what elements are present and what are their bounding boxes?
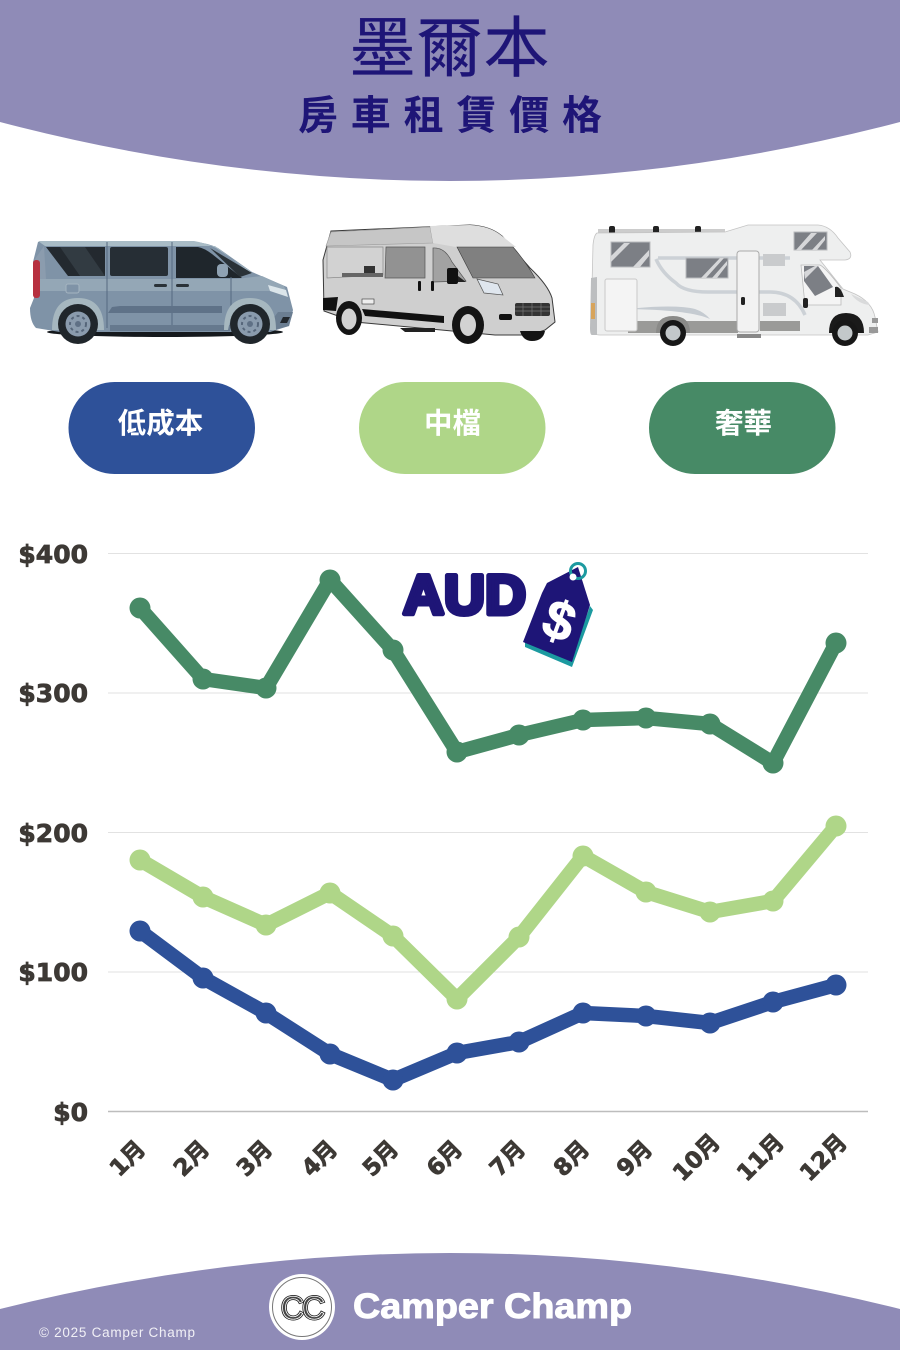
- icon: low-cost minivan: [30, 241, 293, 344]
- x-axis month labels: 10月: [668, 1129, 726, 1187]
- icon: Camper Champ logo: CC: [281, 1290, 324, 1326]
- x-axis month labels: 5月: [358, 1136, 404, 1182]
- legend pill: mid-range: 中檔: [424, 408, 481, 440]
- icon: price tag: [523, 564, 593, 667]
- icon: mid-range van: [323, 225, 555, 344]
- x-axis month labels: 6月: [422, 1136, 468, 1182]
- x-axis month labels: [105, 1129, 853, 1187]
- y-axis labels: $0: [53, 1098, 88, 1127]
- legend pill: low cost: 低成本: [118, 408, 203, 440]
- series: mid-range: [130, 816, 846, 1010]
- callout: AUD currency tag: [403, 563, 593, 667]
- series: low cost: [130, 920, 846, 1090]
- x-axis month labels: 7月: [485, 1136, 531, 1182]
- x-axis month labels: 9月: [612, 1136, 658, 1182]
- x-axis month labels: 1月: [105, 1136, 151, 1182]
- callout: AUD currency tag: AUD: [403, 563, 526, 626]
- title: 墨爾本: [350, 11, 550, 85]
- legend pill: luxury: 奢華: [715, 408, 772, 440]
- subtitle: 房車租賃價格: [298, 94, 602, 138]
- x-axis month labels: 11月: [732, 1129, 790, 1187]
- footer banner: [0, 1253, 900, 1350]
- x-axis month labels: 8月: [549, 1136, 595, 1182]
- x-axis month labels: 4月: [297, 1136, 343, 1182]
- series: luxury: [130, 570, 846, 774]
- x-axis month labels: 3月: [232, 1136, 278, 1182]
- y-axis labels: $400: [18, 540, 88, 569]
- icon: Camper Champ logo: CC: [281, 1290, 324, 1326]
- header banner: [0, 0, 900, 181]
- y-axis labels: [18, 540, 88, 1127]
- legend pill: mid-range: [359, 382, 546, 474]
- x-axis month labels: 12月: [795, 1129, 853, 1187]
- copyright: © 2025 Camper Champ: [39, 1325, 195, 1340]
- icon: luxury motorhome: [590, 225, 878, 346]
- icon: Camper Champ logo: [269, 1274, 335, 1340]
- x-axis month labels: 2月: [169, 1136, 215, 1182]
- icon: price tag: $: [535, 588, 584, 654]
- y-axis labels: $300: [18, 679, 88, 708]
- line chart: [18, 540, 868, 1187]
- legend pill: luxury: [649, 382, 836, 474]
- legend pill: low cost: [68, 382, 255, 474]
- brand name: Camper Champ: [353, 1287, 632, 1326]
- y-axis labels: $200: [18, 819, 88, 848]
- y-axis labels: $100: [18, 958, 88, 987]
